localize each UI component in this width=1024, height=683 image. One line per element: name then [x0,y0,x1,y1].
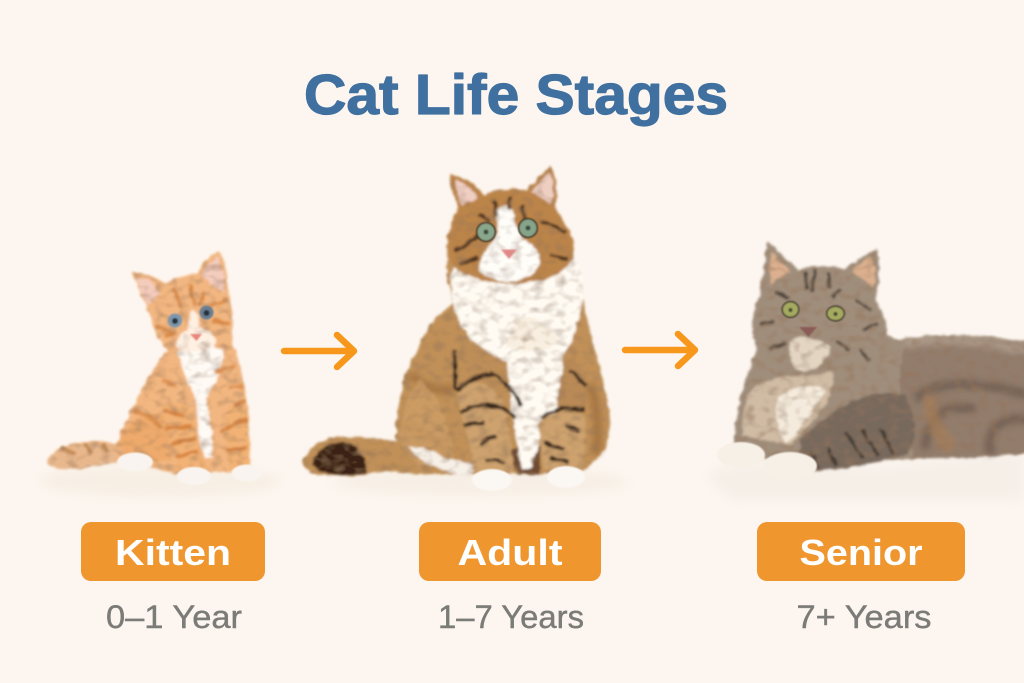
nose: senior [799,327,817,337]
arrow: adult to senior [625,334,695,366]
paws: kitten [117,452,262,485]
label: kitten [81,522,265,581]
age: kitten: 0–1 Year [106,599,242,635]
label: senior [757,522,965,581]
paws: senior [717,442,817,480]
carpet: adult [330,468,630,496]
age: senior: 7+ Years [796,599,932,635]
paws: adult [472,466,585,491]
carpet: kitten [38,465,282,497]
eyes: adult [476,218,538,242]
nose: adult [501,250,517,259]
eyes: senior [782,301,845,322]
arrow: kitten to adult [284,335,354,367]
illustration: tabby adult cat [303,166,610,491]
label: adult [419,522,601,581]
label: kitten: Kitten [115,532,231,573]
age: adult: 1–7 Years [438,599,584,635]
panel: kitten [38,250,282,497]
illustration: grey long-haired senior cat [717,242,1024,480]
label: adult: Adult [458,532,563,573]
title: Cat Life Stages [304,63,728,127]
label: senior: Senior [800,532,922,573]
panel: senior [705,242,1024,500]
carpet: senior [705,452,1024,500]
panel: adult [303,166,630,496]
eyes: kitten [168,306,214,328]
nose: kitten [190,334,202,341]
illustration: orange kitten [47,250,262,485]
